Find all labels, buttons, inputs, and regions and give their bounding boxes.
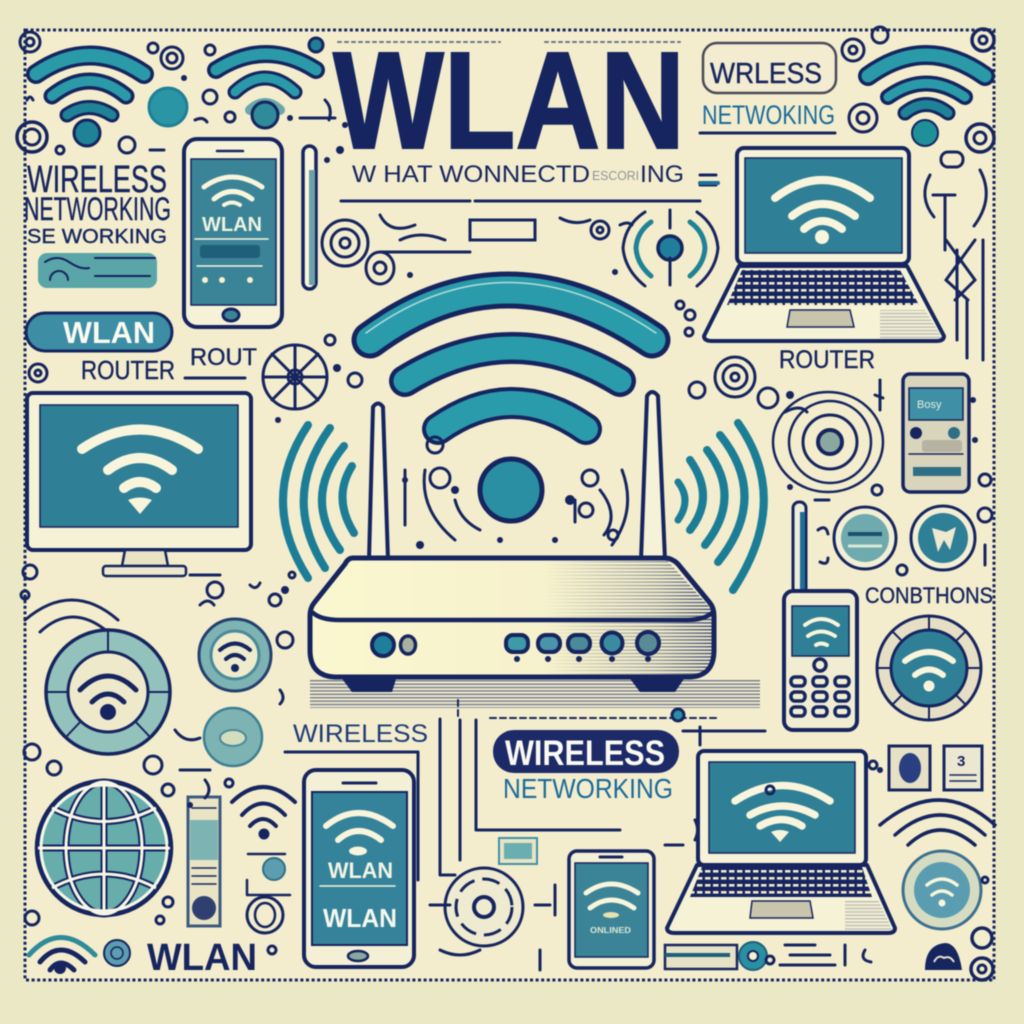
label: router right: ROUTER (779, 346, 875, 374)
connector lines (285, 719, 620, 880)
icon: picture tile (889, 746, 930, 790)
router shadow hatch (310, 680, 760, 708)
icon: laptop bottom (667, 751, 895, 933)
heading: wireless networking left: WIRELESS (27, 159, 167, 201)
label: connections: CONBTHONS (865, 583, 993, 608)
icon: phone bottom: WLAN (328, 858, 393, 883)
left antenna (369, 404, 388, 560)
icon: navy wifi (232, 787, 295, 840)
icon: wifi top right (868, 55, 985, 146)
icon: eye tile (247, 854, 290, 933)
block: teal info bar (38, 253, 157, 288)
icon: concentric rings (773, 392, 883, 492)
icon: round button equals (834, 507, 896, 569)
heading: wireless networking left: NETWORKING (24, 191, 171, 227)
central wifi symbol (366, 282, 656, 521)
subtitle: ESCORI (592, 168, 639, 183)
icon: handheld device (903, 374, 969, 492)
icon: stylus (303, 146, 316, 289)
pill: wireless: WIRELESS (505, 734, 665, 773)
badge: wireless label (703, 43, 836, 93)
label: networking centre: NETWORKING (503, 773, 673, 804)
subtitle: ING (640, 161, 684, 188)
icon: small badge (104, 940, 130, 966)
title: WLAN (333, 24, 685, 178)
subtitle (352, 161, 684, 188)
icon: wifi dial left (25, 600, 170, 754)
router body (310, 558, 714, 677)
right antenna (641, 392, 665, 560)
icon: calendar tile (944, 746, 982, 790)
router (310, 392, 760, 708)
icon: gear dial (445, 868, 523, 946)
icon: wifi top centre left (216, 54, 316, 128)
pill: WLAN (26, 313, 172, 351)
small screen tile (499, 838, 537, 864)
icon: slider bar (665, 942, 767, 970)
badge: wireless label: WRLESS (710, 58, 822, 90)
status lights (372, 632, 659, 662)
icon: calendar tile: 3 (957, 753, 965, 770)
right foot (628, 676, 686, 692)
icon: tablet: ONLINED (590, 926, 631, 935)
icon: walkie phone (784, 502, 857, 730)
signal waves right (678, 423, 764, 590)
icon: cloud tile (925, 943, 962, 970)
heading: wireless networking left (24, 159, 171, 248)
icon: laptop top (704, 148, 944, 341)
left foot (340, 676, 397, 692)
icon: phone top (184, 139, 282, 327)
icon: globe (37, 781, 171, 915)
icon: wifi dial right (877, 616, 981, 720)
icon: phone bottom (304, 770, 414, 967)
icon: wifi badge (199, 619, 271, 691)
icon: monitor (27, 393, 251, 576)
icon: phone top: WLAN (202, 214, 262, 236)
icon: wifi top left (36, 56, 144, 146)
icon: signal beacon (623, 210, 718, 286)
icon: bottom right circular wifi (880, 800, 995, 929)
label: wireless bottom: WIRELESS (293, 720, 428, 748)
pill: WLAN: WLAN (63, 315, 155, 350)
signal waves left (283, 425, 354, 578)
icon: round button symbol (911, 506, 975, 570)
subtitle: W HAT WONNECTD (352, 161, 590, 188)
icon: tablet (569, 851, 654, 968)
icon: small wifi bottom left (29, 938, 95, 974)
icon: round minus badge (204, 708, 262, 766)
label: networking top right: NETWOKING (702, 100, 835, 130)
label: rout: ROUT (190, 344, 257, 371)
label: router left: ROUTER (81, 355, 175, 385)
icon: phone bottom: WLAN (323, 903, 397, 933)
heading: wireless networking left: SE WORKING (27, 226, 167, 248)
icon: book spine (188, 797, 220, 926)
icon: handheld device: Bosy (917, 399, 942, 411)
label: WLAN bottom: WLAN (147, 937, 257, 979)
